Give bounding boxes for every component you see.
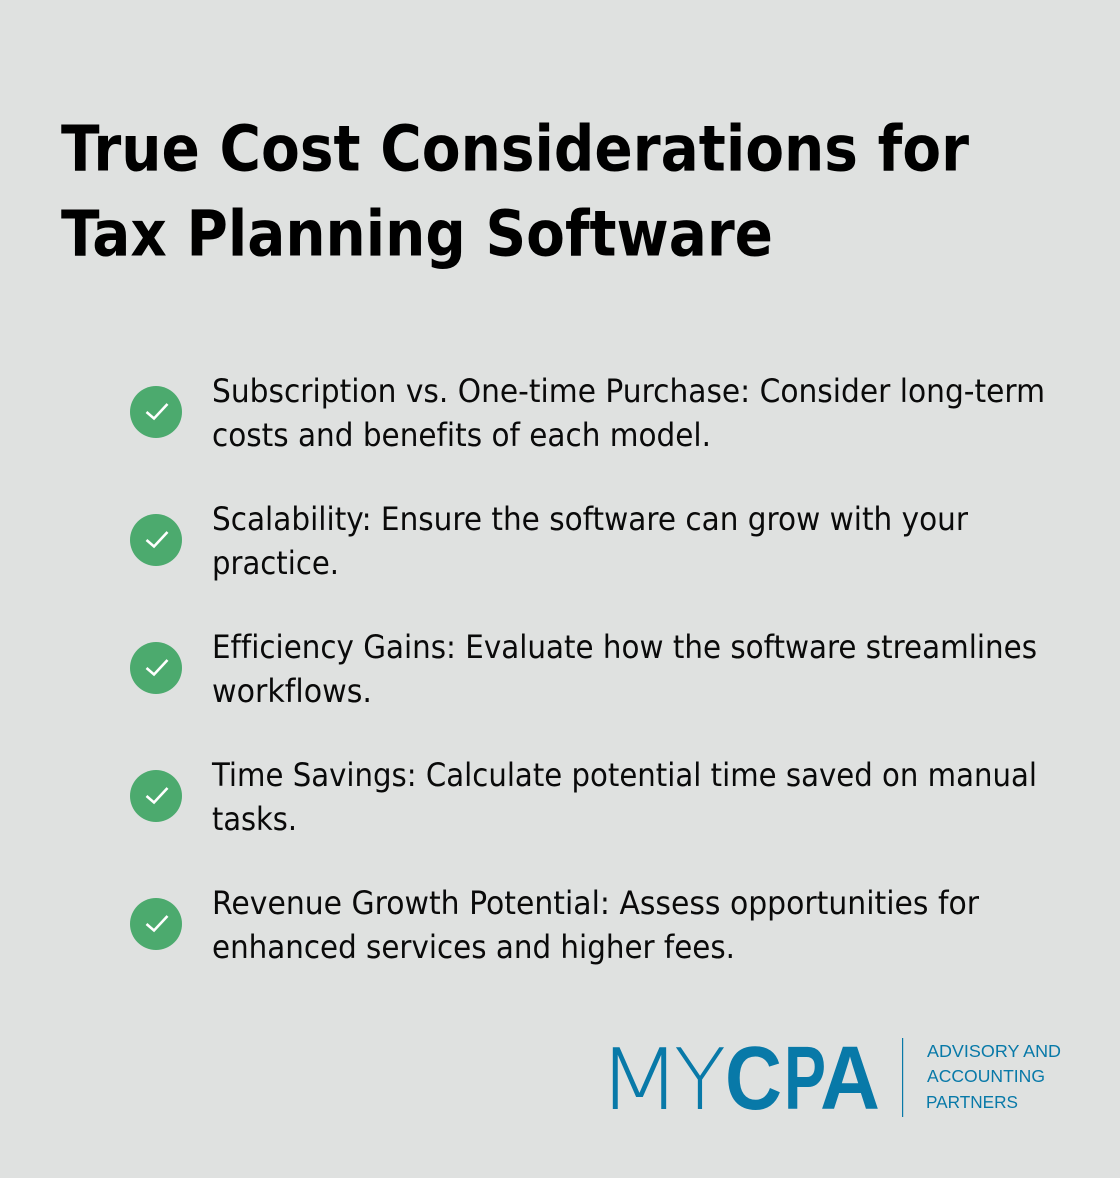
item: time savings <box>130 756 1037 838</box>
checklist <box>130 372 1045 966</box>
logo: MYCPA: P <box>784 1029 826 1129</box>
item: time savings: Time Savings: Calculate potential time saved on manual <box>211 756 1037 794</box>
item: revenue growth potential <box>130 884 980 966</box>
logo: MYCPA: Y <box>674 1031 726 1130</box>
title <box>61 112 969 270</box>
item: efficiency gains <box>130 628 1037 710</box>
logo: MYCPA: ACCOUNTING <box>927 1066 1045 1086</box>
item: time savings: tasks. <box>212 800 297 838</box>
logo: MYCPA: PARTNERS <box>926 1092 1018 1112</box>
item: scalability: practice. <box>212 544 339 582</box>
item: subscription vs one-time purchase: costs and benefits of each model. <box>212 416 711 454</box>
item: subscription vs one-time purchase: Subscription vs. One-time Purchase: Consider long-term <box>212 372 1045 410</box>
item: scalability <box>130 500 969 582</box>
item: scalability: Scalability: Ensure the software can grow with your <box>212 500 969 538</box>
item: subscription vs one-time purchase <box>130 372 1045 454</box>
item: revenue growth potential: enhanced services and higher fees. <box>212 928 735 966</box>
logo: MYCPA: A <box>820 1029 880 1129</box>
title: Tax Planning Software <box>61 198 773 270</box>
logo: MYCPA: C <box>725 1029 782 1129</box>
item: revenue growth potential: Revenue Growth Potential: Assess opportunities for <box>212 884 980 922</box>
item: efficiency gains: Efficiency Gains: Evaluate how the software streamlines <box>212 628 1037 666</box>
logo: MYCPA: M <box>597 1031 682 1130</box>
item: efficiency gains: workflows. <box>212 672 372 710</box>
logo: MYCPA: ADVISORY AND <box>927 1041 1061 1061</box>
title: True Cost Considerations for <box>61 112 969 186</box>
logo: MYCPA <box>597 1029 1061 1130</box>
